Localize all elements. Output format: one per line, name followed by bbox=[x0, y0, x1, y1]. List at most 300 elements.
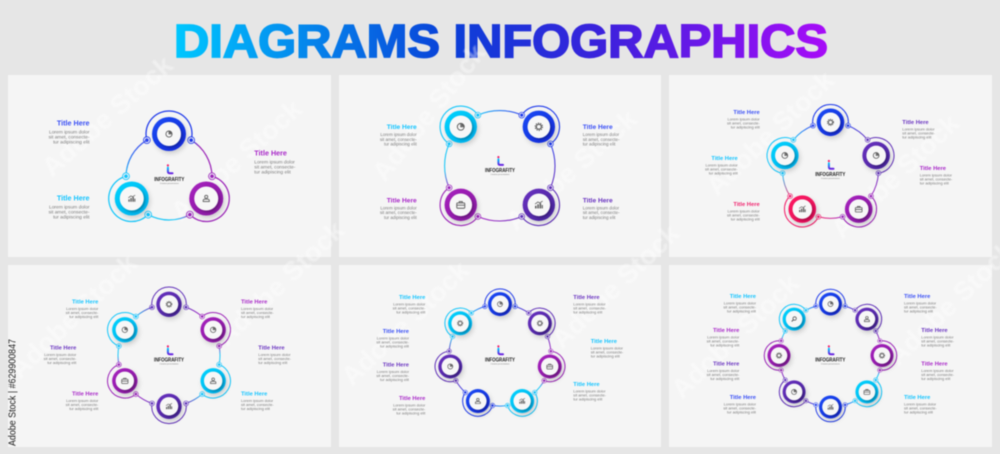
label: blue: tur adipiscing elit bbox=[380, 343, 410, 348]
label: indigo: Title Here bbox=[583, 197, 613, 204]
label: cyan: sit amet, consecte- bbox=[380, 137, 417, 142]
label: indigo: Title Here bbox=[50, 345, 77, 351]
outer arc bbox=[152, 403, 186, 424]
label: pink: tur adipiscing elit bbox=[731, 217, 761, 222]
disc with pie icon bbox=[771, 142, 799, 169]
step 1: blue node bbox=[143, 111, 212, 176]
disc with chart icon bbox=[115, 182, 149, 216]
label: blue: Lorem ipsum dolor bbox=[49, 129, 90, 135]
label: pink: sit amet, consecte- bbox=[727, 213, 760, 218]
link to next node bbox=[515, 306, 529, 313]
step 1: cyan node bbox=[428, 74, 522, 168]
label: cyan bbox=[66, 299, 99, 319]
label: indigo right: sit amet, consecte- bbox=[258, 356, 292, 361]
label: cyan: Lorem ipsum dolor bbox=[705, 163, 738, 168]
label: blue: Title Here bbox=[583, 124, 613, 131]
label: indigo right: tur adipiscing elit bbox=[258, 360, 288, 365]
step 3: magenta node bbox=[529, 346, 568, 398]
link to next node bbox=[876, 370, 880, 380]
link to next node bbox=[446, 337, 456, 351]
panel: six-step cycle bbox=[3, 214, 351, 447]
step 5: cyan node bbox=[762, 115, 813, 180]
disc with gear icon bbox=[528, 311, 552, 335]
label: indigo: sit amet, consecte- bbox=[583, 210, 620, 215]
disc with search icon bbox=[783, 308, 806, 331]
center logo: Creative presentations bbox=[160, 182, 179, 185]
link to next node bbox=[535, 379, 544, 394]
link to next node bbox=[778, 370, 788, 380]
label: cyan right: tur adipiscing elit bbox=[904, 409, 934, 414]
step 2: indigo node bbox=[843, 296, 896, 348]
label: magenta: Lorem ipsum dolor bbox=[254, 160, 295, 166]
label: magenta: sit amet, consecte- bbox=[254, 165, 296, 171]
panel: seven-step cycle: Adobe Stock bbox=[545, 217, 686, 354]
link to next node bbox=[781, 331, 785, 341]
outer arc bbox=[507, 392, 542, 421]
disc with pie icon bbox=[819, 292, 842, 316]
label: blue: Lorem ipsum dolor bbox=[724, 401, 757, 406]
link to next node bbox=[845, 398, 855, 408]
link to next node bbox=[191, 140, 212, 176]
label: cyan: Lorem ipsum dolor bbox=[380, 132, 417, 137]
outer arc bbox=[485, 289, 515, 306]
disc with briefcase icon bbox=[845, 195, 873, 223]
label: indigo right bbox=[921, 328, 955, 347]
label: magenta: Title Here bbox=[920, 166, 947, 172]
label: magenta right: sit amet, consecte- bbox=[241, 310, 274, 315]
step 6: indigo node bbox=[429, 335, 468, 387]
panel: three-step cycle: Adobe Stock bbox=[165, 93, 308, 226]
label: cyan right upper bbox=[591, 339, 624, 358]
link to next node bbox=[542, 337, 556, 351]
center logo: INFOGRAFITY bbox=[154, 358, 184, 364]
label: magenta right: Lorem ipsum dolor bbox=[921, 368, 954, 373]
label: cyan: Title Here bbox=[57, 194, 90, 203]
step 2: magenta node bbox=[188, 304, 245, 367]
link to next node bbox=[848, 126, 868, 140]
disc with pie icon bbox=[152, 117, 186, 151]
link to next node bbox=[136, 303, 152, 321]
outer arc bbox=[880, 341, 897, 370]
center logo: INFOGRAFITY bbox=[485, 358, 515, 364]
label: cyan bbox=[380, 124, 417, 146]
outer arc bbox=[867, 133, 899, 173]
label: indigo right: Title Here bbox=[258, 345, 285, 351]
label: indigo bbox=[902, 120, 936, 140]
label: pink: Title Here bbox=[733, 202, 760, 208]
step 7: cyan node bbox=[436, 290, 491, 347]
label: blue: Title Here bbox=[733, 110, 760, 116]
link to next node bbox=[818, 205, 843, 228]
label: indigo right: Lorem ipsum dolor bbox=[258, 352, 291, 357]
disc with chart icon bbox=[788, 195, 816, 223]
disc with chart icon bbox=[510, 389, 534, 413]
label: cyan right: Title Here bbox=[241, 391, 268, 397]
label: cyan right bbox=[904, 395, 937, 414]
outer arc bbox=[842, 196, 884, 234]
label: cyan: Title Here bbox=[711, 156, 738, 162]
label: indigo: Title Here bbox=[902, 120, 929, 126]
label: indigo bbox=[707, 361, 740, 381]
label: indigo right: tur adipiscing elit bbox=[921, 342, 951, 347]
link to next node bbox=[793, 121, 813, 144]
label: magenta: Lorem ipsum dolor bbox=[920, 173, 953, 178]
outer arc bbox=[458, 392, 493, 421]
label: cyan: sit amet, consecte- bbox=[48, 210, 90, 216]
label: cyan bbox=[723, 294, 757, 314]
outer arc bbox=[432, 98, 478, 144]
label: indigo: sit amet, consecte- bbox=[376, 373, 410, 378]
label: indigo: Title Here bbox=[383, 362, 410, 368]
outer arc bbox=[202, 364, 237, 404]
center logo: Creative presentations bbox=[160, 362, 179, 365]
step 4: pink node bbox=[761, 172, 830, 236]
label: cyan right: tur adipiscing elit bbox=[241, 406, 271, 411]
label: cyan: tur adipiscing elit bbox=[727, 309, 757, 314]
label: magenta right bbox=[241, 299, 274, 319]
label: magenta right: Title Here bbox=[921, 361, 948, 367]
disc with user icon bbox=[189, 182, 223, 216]
label: blue: Lorem ipsum dolor bbox=[377, 335, 410, 340]
label: blue: sit amet, consecte- bbox=[48, 134, 90, 140]
label: indigo: Lorem ipsum dolor bbox=[377, 369, 410, 374]
label: cyan: Title Here bbox=[387, 124, 417, 131]
label: indigo bbox=[44, 345, 77, 365]
disc with pie icon bbox=[112, 317, 138, 342]
center logo: Creative presentations bbox=[491, 362, 510, 365]
outer arc bbox=[762, 133, 794, 173]
outer arc bbox=[529, 302, 561, 337]
step 7: magenta node bbox=[764, 331, 790, 372]
link to next node bbox=[529, 144, 572, 188]
disc with gear icon bbox=[817, 108, 844, 136]
link to next node bbox=[136, 394, 152, 403]
step 5: blue node bbox=[806, 396, 847, 422]
center logo bbox=[815, 345, 846, 365]
panel: eight-step cycle bbox=[665, 234, 1000, 447]
label: cyan: Lorem ipsum dolor bbox=[49, 205, 90, 211]
label: indigo: sit amet, consecte- bbox=[707, 372, 740, 377]
outer arc bbox=[101, 364, 136, 404]
panel: six-step cycle: Adobe Stock bbox=[3, 247, 144, 384]
label: magenta: Title Here bbox=[399, 396, 426, 402]
step 5: blue node bbox=[445, 374, 500, 423]
label: indigo right: sit amet, consecte- bbox=[921, 338, 955, 343]
label: cyan: sit amet, consecte- bbox=[723, 305, 757, 310]
label: magenta: tur adipiscing elit bbox=[710, 342, 740, 347]
panel: seven-step cycle bbox=[335, 217, 686, 447]
label: blue: Title Here bbox=[730, 395, 757, 401]
label: indigo right: sit amet, consecte- bbox=[573, 306, 607, 311]
link to next node bbox=[774, 173, 798, 196]
outer arc bbox=[764, 341, 781, 370]
label: indigo: Title Here bbox=[713, 361, 740, 367]
center logo: INFOGRAFITY bbox=[815, 358, 846, 364]
label: magenta bbox=[66, 391, 99, 411]
panel: seven-step cycle: Adobe Stock bbox=[335, 254, 476, 391]
step 6: cyan node bbox=[100, 292, 156, 355]
outer arc bbox=[152, 287, 186, 307]
label: indigo right bbox=[573, 295, 607, 315]
label: indigo right: tur adipiscing elit bbox=[573, 310, 603, 315]
label: indigo: Lorem ipsum dolor bbox=[583, 206, 620, 210]
label: magenta: tur adipiscing elit bbox=[396, 410, 426, 415]
label: blue bbox=[376, 329, 410, 348]
label: cyan bbox=[705, 156, 739, 176]
panel: three-step cycle bbox=[8, 49, 331, 257]
disc with briefcase icon bbox=[445, 189, 477, 221]
label: magenta: tur adipiscing elit bbox=[69, 406, 99, 411]
label: indigo right: Lorem ipsum dolor bbox=[921, 334, 954, 339]
disc with briefcase icon bbox=[538, 354, 562, 378]
label: magenta: Title Here bbox=[72, 391, 99, 397]
label: indigo: tur adipiscing elit bbox=[710, 376, 740, 381]
label: blue: Title Here bbox=[57, 118, 90, 127]
disc with gear icon bbox=[768, 344, 790, 367]
label: indigo bbox=[376, 362, 410, 382]
label: magenta right: Title Here bbox=[241, 299, 268, 305]
label: cyan: sit amet, consecte- bbox=[705, 167, 738, 172]
label: cyan right lower bbox=[573, 382, 607, 402]
panel: four-step cycle: Adobe Stock bbox=[500, 103, 643, 236]
label: cyan right lower: tur adipiscing elit bbox=[573, 397, 603, 402]
label: magenta: sit amet, consecte- bbox=[707, 338, 740, 343]
label: cyan right bbox=[241, 391, 274, 411]
link to next node bbox=[148, 197, 190, 233]
label: blue: tur adipiscing elit bbox=[583, 141, 616, 146]
label: magenta: Title Here bbox=[254, 149, 287, 158]
label: magenta: Lorem ipsum dolor bbox=[707, 334, 740, 339]
center logo: Creative presentations bbox=[821, 362, 840, 365]
step 3: magenta node bbox=[817, 182, 886, 247]
label: blue right bbox=[904, 294, 937, 314]
step 2: blue node bbox=[498, 94, 591, 188]
label: blue: Lorem ipsum dolor bbox=[727, 117, 760, 122]
outer arc bbox=[773, 380, 806, 413]
step 6: indigo node bbox=[765, 363, 818, 415]
label: cyan: sit amet, consecte- bbox=[393, 306, 426, 311]
label: blue bbox=[48, 118, 90, 145]
link to next node bbox=[116, 140, 157, 176]
center logo bbox=[815, 160, 846, 180]
label: indigo: sit amet, consecte- bbox=[902, 131, 936, 136]
step 4: indigo node bbox=[136, 394, 188, 424]
label: magenta: Title Here bbox=[713, 328, 740, 334]
disc with gear icon bbox=[523, 111, 555, 143]
label: magenta bbox=[920, 166, 953, 186]
label: cyan right lower: sit amet, consecte- bbox=[573, 393, 607, 398]
outer arc bbox=[773, 298, 806, 331]
label: indigo: sit amet, consecte- bbox=[44, 356, 77, 361]
step 3: indigo node bbox=[478, 164, 571, 257]
label: blue: sit amet, consecte- bbox=[376, 339, 410, 344]
link to next node bbox=[471, 302, 485, 317]
label: blue: Title Here bbox=[383, 329, 410, 335]
link to next node bbox=[845, 306, 855, 310]
center logo: Creative presentations bbox=[491, 173, 510, 176]
center logo bbox=[154, 164, 185, 185]
outer arc bbox=[521, 187, 568, 234]
label: cyan: tur adipiscing elit bbox=[709, 171, 739, 176]
link to next node bbox=[478, 93, 522, 137]
label: cyan right upper: Lorem ipsum dolor bbox=[591, 345, 624, 350]
label: cyan right: sit amet, consecte- bbox=[904, 405, 937, 410]
panel: three-step cycle: Adobe Stock bbox=[36, 49, 179, 182]
label: cyan right: sit amet, consecte- bbox=[241, 402, 274, 407]
link to next node bbox=[186, 307, 202, 317]
center logo: Creative presentations bbox=[821, 177, 840, 180]
disc with pie icon bbox=[200, 317, 226, 342]
label: magenta: Lorem ipsum dolor bbox=[380, 206, 417, 210]
label: cyan: sit amet, consecte- bbox=[66, 310, 99, 315]
label: blue: sit amet, consecte- bbox=[583, 137, 620, 142]
outer arc bbox=[101, 306, 136, 346]
label: magenta bbox=[707, 328, 740, 347]
center logo: INFOGRAFITY bbox=[154, 177, 185, 183]
label: indigo: tur adipiscing elit bbox=[47, 360, 77, 365]
label: cyan: tur adipiscing elit bbox=[53, 215, 90, 221]
disc with gear icon bbox=[448, 311, 472, 335]
label: magenta right: tur adipiscing elit bbox=[921, 376, 951, 381]
step 3: cyan node bbox=[90, 140, 181, 232]
outer arc bbox=[432, 351, 456, 385]
label: magenta: sit amet, consecte- bbox=[393, 406, 426, 411]
panel: four-step cycle: Adobe Stock bbox=[366, 37, 492, 187]
label: cyan right lower: Title Here bbox=[573, 382, 600, 388]
label: cyan right: Title Here bbox=[904, 395, 931, 401]
outer arc bbox=[202, 306, 237, 346]
label: cyan: Title Here bbox=[72, 299, 99, 305]
label: pink bbox=[727, 202, 761, 222]
outer arc bbox=[855, 298, 888, 331]
label: magenta: Lorem ipsum dolor bbox=[66, 398, 99, 403]
disc with gear icon bbox=[870, 344, 894, 367]
outer arc bbox=[816, 405, 845, 422]
disc with user icon bbox=[855, 308, 878, 331]
label: blue right: Lorem ipsum dolor bbox=[904, 301, 937, 306]
label: blue: sit amet, consecte- bbox=[727, 121, 760, 126]
label: blue bbox=[727, 110, 761, 130]
label: magenta right: sit amet, consecte- bbox=[921, 372, 955, 377]
step 2: magenta node bbox=[148, 155, 239, 247]
label: indigo right bbox=[258, 345, 292, 365]
outer arc bbox=[521, 98, 568, 144]
label: cyan: Lorem ipsum dolor bbox=[393, 302, 426, 307]
label: magenta: tur adipiscing elit bbox=[254, 170, 291, 176]
label: magenta right: tur adipiscing elit bbox=[241, 314, 271, 319]
step 2: indigo node bbox=[853, 131, 905, 196]
center logo bbox=[485, 345, 515, 365]
label: indigo right: Lorem ipsum dolor bbox=[573, 302, 606, 307]
link to next node bbox=[111, 346, 127, 365]
link to next node bbox=[806, 401, 816, 405]
label: blue right: Title Here bbox=[904, 294, 931, 300]
label: blue: tur adipiscing elit bbox=[727, 409, 757, 414]
panel: eight-step cycle: Adobe Stock bbox=[665, 267, 806, 404]
panel: five-step cycle: Adobe Stock bbox=[700, 64, 841, 201]
label: cyan bbox=[48, 194, 90, 221]
label: indigo right: Title Here bbox=[921, 328, 948, 334]
disc with gear icon bbox=[156, 292, 182, 317]
panel: four-step cycle bbox=[339, 37, 661, 257]
disc with chart icon bbox=[819, 396, 842, 418]
step 1: blue node bbox=[483, 289, 529, 316]
label: cyan: tur adipiscing elit bbox=[69, 314, 99, 319]
label: indigo: tur adipiscing elit bbox=[583, 215, 616, 220]
outer arc bbox=[855, 380, 888, 413]
label: blue: tur adipiscing elit bbox=[731, 125, 761, 130]
center logo bbox=[154, 345, 184, 365]
step 3: cyan node bbox=[182, 355, 238, 418]
link to next node bbox=[427, 144, 471, 188]
link to next node bbox=[186, 389, 202, 408]
disc with pie icon bbox=[438, 354, 462, 378]
label: cyan right: Lorem ipsum dolor bbox=[904, 401, 937, 406]
outer arc bbox=[146, 111, 192, 140]
label: cyan: Title Here bbox=[730, 294, 757, 300]
stock id strip: Adobe Stock | #629900847 bbox=[6, 339, 18, 446]
disc with briefcase icon bbox=[855, 380, 878, 403]
title: DIAGRAMS INFOGRAPHICS bbox=[174, 15, 828, 67]
label: blue right: tur adipiscing elit bbox=[904, 309, 934, 314]
label: cyan right upper: tur adipiscing elit bbox=[591, 353, 621, 358]
label: cyan: Lorem ipsum dolor bbox=[724, 301, 757, 306]
step 1: indigo node bbox=[150, 287, 202, 317]
disc with briefcase icon bbox=[112, 368, 138, 394]
label: indigo bbox=[583, 197, 620, 220]
label: cyan right upper: Title Here bbox=[591, 339, 618, 345]
disc with user icon bbox=[466, 389, 490, 413]
label: magenta right: Lorem ipsum dolor bbox=[241, 306, 274, 311]
label: cyan right: Lorem ipsum dolor bbox=[241, 398, 274, 403]
panel: six-step cycle: Adobe Stock bbox=[210, 214, 351, 351]
label: magenta: tur adipiscing elit bbox=[384, 215, 417, 220]
link to next node bbox=[865, 173, 884, 196]
step 2: indigo node bbox=[516, 299, 571, 356]
label: indigo right: Title Here bbox=[573, 295, 600, 301]
label: cyan: Lorem ipsum dolor bbox=[66, 306, 99, 311]
outer arc bbox=[189, 176, 238, 230]
label: indigo: tur adipiscing elit bbox=[380, 377, 410, 382]
label: magenta: Title Here bbox=[387, 197, 417, 204]
label: magenta bbox=[380, 197, 417, 220]
step 4: magenta node bbox=[408, 144, 502, 237]
label: blue: Lorem ipsum dolor bbox=[583, 132, 620, 137]
label: indigo: tur adipiscing elit bbox=[902, 135, 932, 140]
disc with pie icon bbox=[783, 380, 806, 403]
disc with chart icon bbox=[523, 189, 555, 221]
panel: five-step cycle bbox=[669, 64, 992, 257]
disc with pie icon bbox=[862, 142, 890, 169]
link to next node bbox=[873, 331, 883, 341]
outer arc bbox=[544, 351, 568, 385]
label: magenta right bbox=[921, 361, 955, 381]
center logo: INFOGRAFITY bbox=[815, 172, 846, 178]
outer arc bbox=[813, 104, 848, 126]
link to next node bbox=[806, 303, 816, 313]
step 3: magenta node bbox=[870, 339, 897, 380]
center logo: INFOGRAFITY bbox=[485, 168, 515, 174]
label: indigo: Lorem ipsum dolor bbox=[707, 368, 740, 373]
panel: five-step cycle: Adobe Stock bbox=[825, 107, 966, 244]
label: blue right: sit amet, consecte- bbox=[904, 305, 937, 310]
label: pink: Lorem ipsum dolor bbox=[727, 209, 760, 214]
label: cyan: tur adipiscing elit bbox=[396, 310, 426, 315]
label: magenta: tur adipiscing elit bbox=[920, 181, 950, 186]
step 8: cyan node bbox=[771, 290, 823, 343]
step 1: blue node bbox=[814, 289, 855, 316]
step 5: magenta node bbox=[93, 343, 150, 406]
